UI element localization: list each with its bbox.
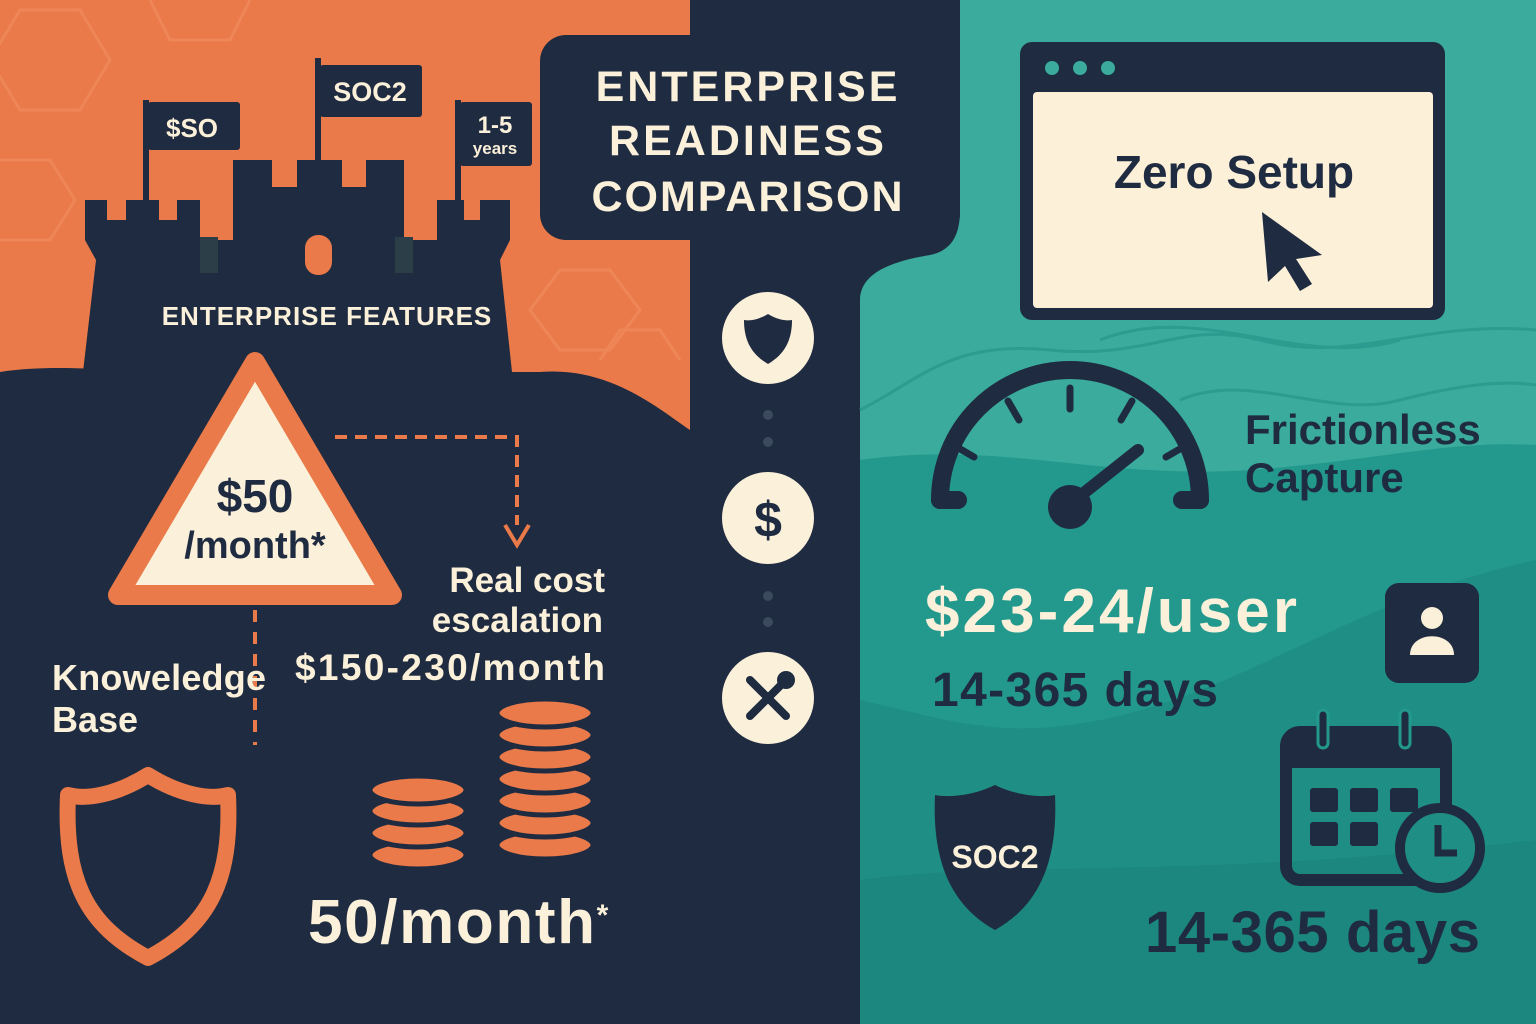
warning triangle <box>118 362 392 595</box>
flag: SOC2: SOC2 <box>333 77 407 107</box>
flag: SOC2 <box>320 65 422 117</box>
flag: SSO: $SO <box>166 113 218 143</box>
text: frictionless capture <box>1245 406 1481 501</box>
text: days: 14-365 days <box>932 664 1218 717</box>
icon: calendar with clock <box>1286 710 1480 888</box>
text: knowledge base: Knoweledge <box>52 657 266 698</box>
text: frictionless capture: Capture <box>1245 454 1404 501</box>
arrow: dashed to cost escalation <box>335 437 517 525</box>
text: bottom days: 14-365 days <box>1145 900 1480 965</box>
flag: SSO <box>148 102 240 150</box>
dashed line: knowledge base <box>253 610 257 745</box>
text: 50/month: * <box>597 899 609 932</box>
icon: shield circle <box>722 292 814 384</box>
icon: orange shield outline <box>68 775 228 958</box>
panel: middle column <box>690 230 860 1024</box>
text: real cost escalation: $150-230/month <box>295 647 605 688</box>
warning triangle: $50 <box>217 470 293 522</box>
icon: coin stacks <box>370 699 593 869</box>
icon: user box <box>1385 583 1479 683</box>
text: knowledge base <box>52 657 266 740</box>
title box: READINESS <box>609 117 887 165</box>
text: frictionless capture: Frictionless <box>1245 406 1481 453</box>
text: knowledge base: Base <box>52 699 138 740</box>
browser window: zero setup <box>1020 42 1445 320</box>
warning triangle: /month* <box>184 525 326 567</box>
title box <box>540 35 960 240</box>
icon: tools circle <box>722 652 814 744</box>
flag: 1-5 years <box>460 102 532 166</box>
text: real cost escalation <box>295 561 605 688</box>
icon: soc2 shield: SOC2 <box>951 839 1039 875</box>
icon: dollar circle <box>722 472 814 564</box>
text: real cost escalation: escalation <box>432 601 603 640</box>
castle label: ENTERPRISE FEATURES <box>162 301 492 331</box>
castle: enterprise features <box>83 58 532 372</box>
title box: ENTERPRISE <box>596 63 900 111</box>
icon: speed gauge <box>940 370 1200 529</box>
browser window: zero setup: Zero Setup <box>1114 146 1354 198</box>
icon: soc2 shield <box>935 785 1055 930</box>
icon: cursor <box>1262 212 1322 291</box>
title box: COMPARISON <box>591 173 905 221</box>
flag: 1-5 years: years <box>473 139 517 158</box>
panel: left navy ground <box>0 368 690 1024</box>
panel: left orange sky <box>0 0 690 430</box>
text: 50/month: 50/month <box>308 888 595 957</box>
text: real cost escalation: Real cost <box>449 561 605 600</box>
icon: dollar circle: $ <box>754 492 782 548</box>
dots <box>763 410 773 627</box>
flag: 1-5 years: 1-5 <box>478 112 512 139</box>
panel: right teal <box>860 0 1536 1024</box>
text: price per user: $23-24/user <box>925 577 1297 646</box>
